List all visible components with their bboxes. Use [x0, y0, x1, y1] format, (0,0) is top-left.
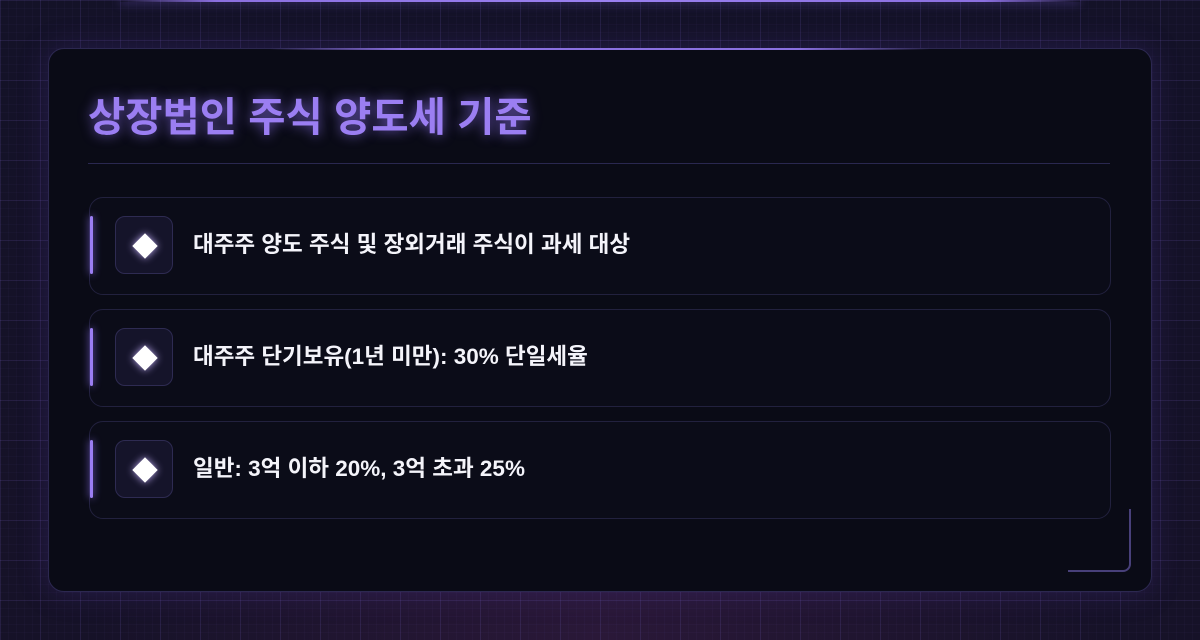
icon: diamond [115, 440, 173, 498]
item 1 [89, 197, 1111, 295]
item 3 [89, 421, 1111, 519]
corner bracket decoration [1068, 509, 1131, 572]
text: item 2: 대주주 단기보유(1년 미만): 30% 단일세율 [193, 344, 588, 369]
text: item 3: 일반: 3억 이하 20%, 3억 초과 25% [193, 456, 525, 481]
top glow bar [120, 0, 1080, 2]
text: item 1: 대주주 양도 주식 및 장외거래 주식이 과세 대상 [193, 232, 630, 257]
panel: main card [48, 48, 1152, 592]
icon: diamond [115, 216, 173, 274]
title: 상장법인 주식 양도세 기준 [88, 94, 532, 140]
item 2 [89, 309, 1111, 407]
icon: diamond [115, 328, 173, 386]
